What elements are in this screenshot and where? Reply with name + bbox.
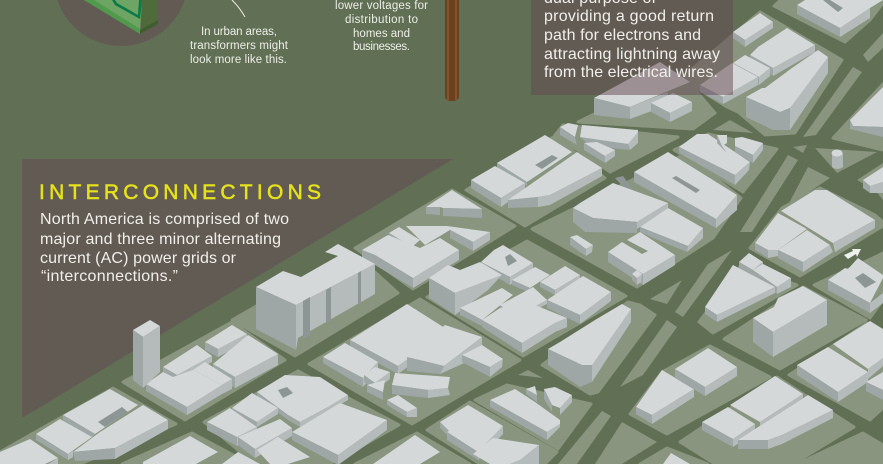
building: courtyard block right <box>828 258 883 313</box>
caption: lower voltages: businesses. <box>353 41 410 53</box>
callout line: urban transformer <box>232 0 245 17</box>
building group: tower block <box>133 320 278 415</box>
building group: block j and h <box>570 152 737 285</box>
heading: interconnections: INTERCONNECTIONS <box>39 181 321 204</box>
building group: block d <box>471 135 602 208</box>
icon: urban transformer in circle <box>54 0 188 46</box>
panel: top right text background <box>531 0 733 95</box>
caption: urban transformers: look more like this. <box>190 54 287 66</box>
text block: lightning wires description: from the electrical wires. <box>544 64 718 81</box>
building group: block ab <box>679 134 763 185</box>
building group: bottom middle block <box>143 375 387 464</box>
building: tall building on panel edge <box>256 244 375 350</box>
text block: lightning wires description: providing a good return <box>544 8 714 25</box>
text block: interconnections description: current (AC) power grids or <box>40 250 237 267</box>
text block: interconnections description: major and three minor alternating <box>40 231 281 248</box>
caption: urban transformers: transformers might <box>190 40 289 52</box>
caption: lower voltages: distribution to <box>345 14 418 26</box>
caption: lower voltages: lower voltages for <box>335 0 428 12</box>
building group: block i <box>429 245 611 353</box>
building group: bottom left block <box>0 389 168 464</box>
icon: road direction arrow <box>844 249 861 259</box>
icon: cylinder tank <box>832 150 843 169</box>
building: triangular block <box>548 304 631 387</box>
building group: central block <box>323 304 503 417</box>
building group: upper right block <box>755 190 875 272</box>
icon: utility pole <box>445 0 459 101</box>
building group: upper block <box>700 13 815 104</box>
building group: under panel <box>594 62 692 122</box>
caption: urban transformers: In urban areas, <box>201 26 277 38</box>
text block: interconnections description: “interconnections.” <box>41 268 178 285</box>
building group: junction blocks <box>636 253 827 424</box>
caption: lower voltages: homes and <box>353 28 410 40</box>
text block: lightning wires description: path for electrons and <box>544 27 701 44</box>
building: block top right <box>797 0 883 37</box>
building group: right edge blocks <box>797 87 883 402</box>
building group: lower centre block <box>373 386 572 464</box>
text block: lightning wires description: attracting lightning away <box>544 46 720 63</box>
building group: block e <box>362 190 490 288</box>
building group: small block <box>560 123 638 163</box>
road islands <box>518 33 883 464</box>
building: rounded corner block <box>746 50 828 130</box>
text block: interconnections description: North America is comprised of two <box>40 211 289 228</box>
panel: interconnections background <box>22 159 453 418</box>
building group: lower right block <box>663 376 833 464</box>
